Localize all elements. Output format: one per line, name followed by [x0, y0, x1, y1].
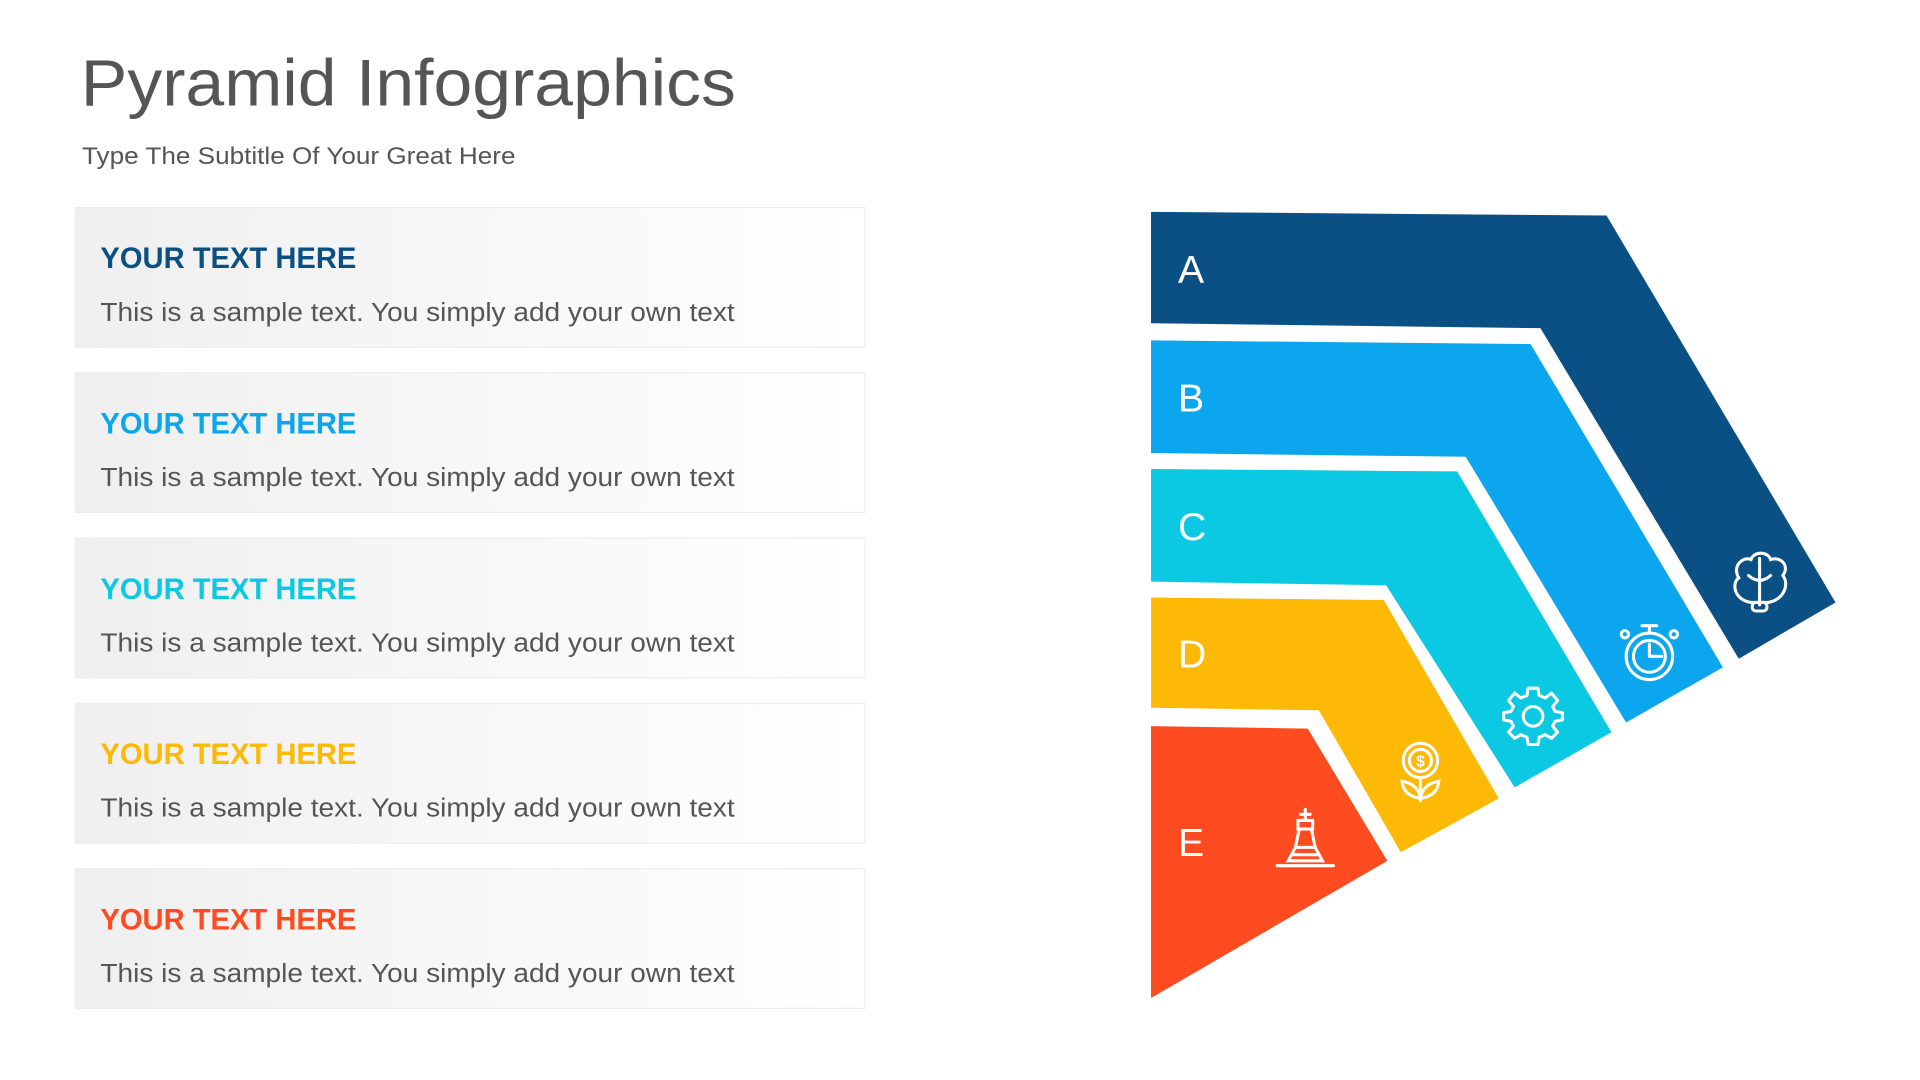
- band E: [1151, 726, 1387, 998]
- icon: gear: [1504, 688, 1562, 744]
- icon: stopwatch: [1621, 626, 1678, 680]
- title: Pyramid Infographics: [81, 46, 736, 120]
- band D: D: [1178, 633, 1206, 676]
- band A: [1151, 212, 1836, 659]
- band E: E: [1178, 822, 1204, 865]
- panel: item A: YOUR TEXT HERE: [100, 242, 356, 275]
- icon: chess king: [1277, 809, 1333, 866]
- panel: item B: This is a sample text. You simply add your own text: [100, 464, 735, 492]
- panel: item B: YOUR TEXT HERE: [100, 407, 356, 440]
- panel: item C: YOUR TEXT HERE: [100, 573, 356, 606]
- band A: A: [1178, 249, 1205, 292]
- panel: item E: [75, 869, 865, 1008]
- band B: B: [1178, 377, 1204, 420]
- icon: money plant: $: [1416, 754, 1425, 771]
- panel: item D: This is a sample text. You simply add your own text: [100, 795, 735, 823]
- panel: item C: This is a sample text. You simply add your own text: [100, 629, 735, 657]
- icon: brain: [1735, 553, 1786, 611]
- icon: money plant: [1402, 743, 1439, 801]
- band B: [1151, 340, 1723, 722]
- panel: item C: [75, 538, 865, 678]
- panel: item D: [75, 703, 865, 843]
- panel: item E: YOUR TEXT HERE: [100, 903, 356, 936]
- band D: [1151, 598, 1499, 852]
- subtitle: Type The Subtitle Of Your Great Here: [82, 143, 516, 170]
- band C: C: [1178, 506, 1206, 549]
- pyramid chart: [1151, 212, 1836, 998]
- panel: item A: [75, 208, 865, 347]
- panel: item E: This is a sample text. You simply add your own text: [100, 960, 735, 988]
- panel: item A: This is a sample text. You simply add your own text: [100, 299, 735, 327]
- panel: item B: [75, 373, 865, 512]
- panel: item D: YOUR TEXT HERE: [100, 738, 356, 771]
- band C: [1151, 469, 1611, 787]
